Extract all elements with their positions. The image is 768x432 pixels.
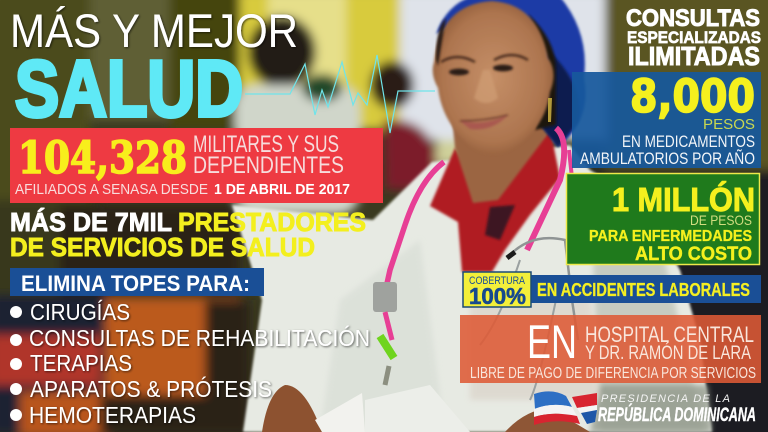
hand and paper bbox=[262, 385, 322, 432]
panel: hospital central bbox=[460, 315, 761, 383]
label: MILITARES Y SUS bbox=[193, 131, 339, 158]
pocket items bbox=[373, 282, 397, 312]
list: coverage items bbox=[10, 299, 370, 428]
title bbox=[10, 4, 298, 133]
list: coverage items: APARATOS & PRÓTESIS bbox=[30, 376, 272, 402]
panel: 104,328 militares: DEPENDIENTES bbox=[193, 152, 344, 179]
heading: consultas especializadas: CONSULTAS bbox=[626, 5, 760, 32]
woman: hair edge bbox=[436, 18, 446, 66]
list: coverage items: CIRUGÍAS bbox=[30, 299, 130, 325]
woman: neck bbox=[452, 118, 551, 203]
number: 104,328 bbox=[18, 133, 187, 184]
heading: prestadores: PRESTADORES bbox=[178, 207, 366, 237]
title: MÁS Y MEJOR bbox=[10, 4, 298, 57]
panel: 8,000 pesos: PESOS bbox=[703, 116, 755, 133]
panel: 1 millon: PARA ENFERMEDADES bbox=[589, 228, 752, 245]
banner: elimina topes: ELIMINA TOPES PARA: bbox=[21, 271, 250, 296]
panel: hospital central: EN bbox=[527, 315, 577, 368]
badge: cobertura 100%: 100% bbox=[469, 283, 526, 309]
panel: 8,000 pesos bbox=[572, 70, 761, 168]
woman: white coat bbox=[232, 145, 712, 432]
woman: blue hat bbox=[436, 0, 586, 147]
heading: prestadores: DE SERVICIOS DE SALUD bbox=[10, 232, 315, 262]
amount: 1 MILLÓN bbox=[612, 181, 755, 218]
logo: presidencia bbox=[534, 391, 756, 426]
panel: 1 millon: ALTO COSTO bbox=[635, 244, 752, 265]
logo: presidencia: PRESIDENCIA DE LA bbox=[601, 393, 730, 405]
panel: 1 millon bbox=[566, 174, 760, 265]
list: coverage items: CONSULTAS DE REHABILITACIÓN bbox=[29, 325, 370, 351]
banner: accidentes laborales bbox=[530, 275, 761, 303]
heartbeat line bbox=[245, 55, 435, 133]
list: coverage items: TERAPIAS bbox=[30, 350, 132, 376]
woman: face bbox=[433, 1, 554, 154]
woman: facial features bbox=[441, 55, 528, 129]
date line: AFILIADOS A SENASA DESDE bbox=[15, 181, 208, 198]
woman: hair bbox=[528, 14, 556, 130]
list: coverage items: HEMOTERAPIAS bbox=[29, 402, 196, 428]
icon: flag bbox=[534, 391, 597, 425]
badge: cobertura 100%: COBERTURA bbox=[469, 275, 526, 287]
heading: prestadores: MÁS DE 7MIL bbox=[10, 207, 172, 237]
title: salud: SALUD bbox=[15, 44, 243, 133]
heading: prestadores bbox=[10, 207, 366, 262]
heading: consultas especializadas bbox=[626, 5, 761, 71]
badge: cobertura 100% bbox=[463, 272, 531, 309]
panel: 1 millon: DE PESOS bbox=[690, 212, 752, 228]
panel: 104,328 militares bbox=[10, 128, 383, 203]
woman: red shirt bbox=[430, 128, 560, 272]
woman: pink stethoscope bbox=[527, 128, 564, 250]
panel: 104,328 militares: 1 DE ABRIL DE 2017 bbox=[214, 181, 350, 198]
